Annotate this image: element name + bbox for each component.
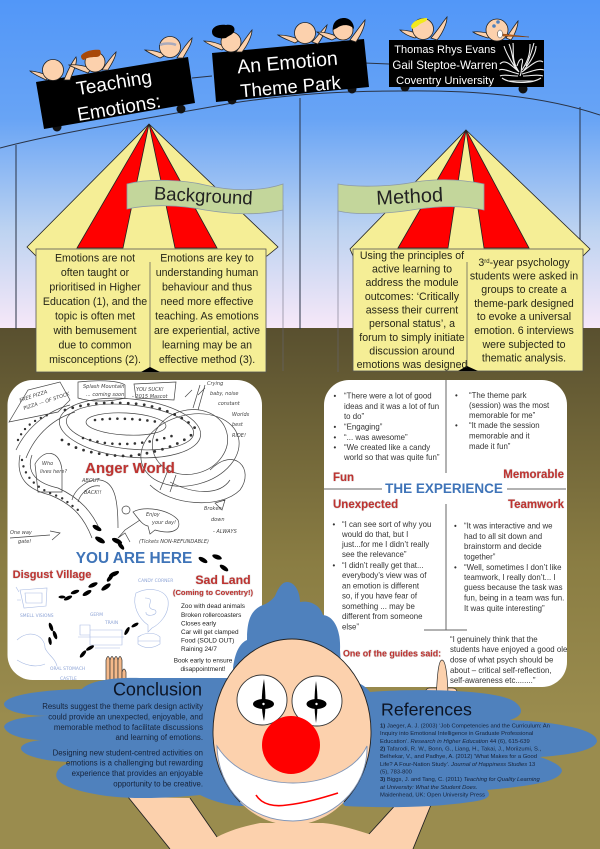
sketch: roller coaster map: YOU SUCK! (136, 387, 164, 393)
sketch: roller coaster map: ABOUT (81, 478, 100, 484)
banner: Method: Method (376, 184, 444, 210)
quotes: teamwork: • (454, 563, 457, 572)
text box: Background: Emotions are not (55, 252, 135, 264)
text: conclusion body: memorable method to facilitate discussions (54, 723, 203, 732)
clown nose (262, 716, 320, 774)
quotes: unexpected: • (332, 561, 336, 570)
quotes: fun: • (334, 392, 336, 400)
text box: Method: forum to simply initiate (359, 332, 465, 344)
sketch: roller coaster map: lives here? (40, 469, 67, 475)
quotes: fun: “... was awesome” (344, 433, 408, 442)
dividers (324, 380, 566, 630)
quotes: memorable (455, 391, 550, 451)
quotes: unexpected: • (332, 520, 336, 529)
text box: Method: -year psychology (490, 257, 570, 269)
quotes: memorable: • (455, 391, 458, 400)
label: Unexpected: Unexpected (333, 499, 398, 511)
quotes: memorable: • (455, 421, 458, 430)
quote: guide: dose of what psych should be (450, 656, 554, 664)
clown mouth (217, 746, 367, 821)
text box: Background: effective method (3). (159, 354, 255, 366)
list: Sad Land attractions: Car will get clamped (181, 629, 239, 636)
label: Anger World: Anger World (85, 460, 175, 477)
text: references list: (5), 783-800 (380, 770, 413, 776)
quote: guide (450, 635, 568, 685)
text box: Method: students were asked in (470, 270, 578, 282)
list: Sad Land attractions: disappointment! (180, 666, 226, 673)
quotes: unexpected: just...for me I didn’t really (341, 540, 429, 549)
roller coaster track and supports (0, 63, 600, 329)
text: conclusion body: Results suggest the theme park design activity (42, 702, 203, 711)
list: Sad Land attractions: Broken rollercoasters (181, 612, 241, 619)
quote: guide: self-awareness etc........” (450, 676, 536, 685)
icon: left eye (237, 675, 287, 725)
label: Disgust Village: Disgust Village (13, 569, 91, 581)
text: references list (380, 724, 550, 798)
text box: Background (36, 249, 266, 372)
sketch: roller coaster map: gate! (18, 539, 31, 545)
text box: Background: learning may be an (162, 340, 252, 352)
quotes: memorable: memorable for me” (469, 411, 536, 420)
sketch: roller coaster map: Enjoy (146, 512, 161, 518)
list: Sad Land attractions: Book early to ensure (174, 658, 233, 664)
text: conclusion body: emotions is a challenging but rewarding (66, 758, 203, 768)
clown body and arms (128, 797, 433, 849)
text box: Method: Using the principles of (360, 250, 464, 262)
text: references list: at University: What the Student Does. (380, 785, 477, 791)
quotes: memorable: made it fun” (469, 442, 511, 451)
rider 4 (204, 25, 252, 52)
text: references list: 2) Tafarodi, R. W., Bonn, G., Liang, H., Takai, J., Moriizumi, S., (380, 746, 542, 752)
sketch: roller coaster map: constant (218, 401, 241, 407)
sketch: roller coaster map: your day! (151, 520, 176, 526)
flagpoles (283, 200, 338, 372)
banner: Background (127, 180, 283, 214)
quotes: memorable: (session) was the most (469, 401, 550, 410)
text: references list: Maidenhead, UK: Open University Press (380, 792, 485, 798)
quotes: fun: • (334, 433, 336, 442)
panel: the experience (324, 380, 568, 687)
quotes: fun (334, 392, 440, 462)
quotes: fun: ideas and it was a lot of fun (344, 402, 439, 411)
list: Sad Land attractions (174, 603, 245, 673)
quotes: teamwork: It was quite interesting” (464, 604, 545, 613)
quotes: memorable: “The theme park (469, 391, 527, 400)
panel: theme park map (8, 380, 262, 682)
text box: Method: personal status’, a (369, 318, 455, 330)
quotes: fun: • (334, 443, 336, 452)
quotes: teamwork (454, 522, 564, 613)
tent: Method (338, 130, 590, 371)
sign: authors: Gail Steptoe-Warren (392, 59, 498, 72)
clown left fingers (106, 656, 126, 690)
quotes: teamwork: together” (464, 552, 496, 562)
quotes: fun: to do” (344, 412, 364, 421)
quotes: teamwork: teamwork, I really don’t... I (464, 573, 556, 582)
cloud: Conclusion (4, 678, 260, 806)
clown head (213, 639, 371, 825)
sketch: blue concept doodles: GERM (90, 612, 103, 618)
text box: Method: outcomes: ‘Critically (365, 291, 460, 303)
sketch: roller coaster map: - 2015 Mascot (132, 394, 168, 400)
text box: Background: teaching. As emotions (155, 310, 259, 322)
sign: authors (389, 40, 544, 94)
text: references list: Belhekar, V., and Padhye, A. (2012) ‘What Makes for a Good (380, 754, 537, 760)
list: Sad Land attractions: Raining 24/7 (181, 646, 217, 653)
text box: Method: 3 (478, 257, 484, 269)
banner: Background: Background (153, 182, 253, 209)
quotes: memorable: memorable and it (469, 432, 530, 440)
tent roof (27, 124, 278, 256)
sketch: roller coaster map: Broken (204, 506, 222, 512)
label: Memorable: Memorable (503, 469, 564, 481)
rider 8 (473, 19, 529, 41)
list: Sad Land attractions: Food (SOLD OUT) (181, 638, 234, 644)
sketch: blue concept doodles: CASTLE (60, 676, 77, 682)
quotes: teamwork: fun, being in a team was fun. (464, 594, 564, 602)
quotes: teamwork: guess because the task was (464, 583, 563, 592)
label: Fun: Fun (333, 472, 354, 484)
list: Sad Land attractions: Closes early (181, 620, 217, 628)
sketch: roller coaster map: - ALWAYS (213, 529, 238, 535)
sketch: blue concept doodles: ORAL STOMACH (50, 666, 85, 672)
sketch: roller coaster map (9, 381, 250, 545)
sketch: roller coaster map: Crying (207, 381, 223, 387)
sketch: roller coaster map: (Tickets NON-REFUNDABLE) (139, 539, 209, 545)
rider 3 (145, 36, 192, 58)
quotes: fun: “There were a lot of good (344, 392, 432, 400)
sign: An Emotion Theme Park (212, 39, 369, 104)
heading: Conclusion: Conclusion (113, 680, 202, 700)
sign: Teaching Emotions: Teaching (75, 67, 153, 100)
text box: Background: Education (1), and the (43, 296, 147, 308)
quotes: fun: “We created like a candy (344, 443, 430, 452)
sketch: roller coaster map: PIZZA — OF STOCK (23, 391, 71, 412)
sketch: roller coaster map: Worlds (232, 412, 250, 418)
tent: Background (27, 124, 283, 372)
text: conclusion body: could provide an unexpected, enjoyable, and (48, 712, 203, 722)
quote: guide: “I genuinely think that the (450, 635, 538, 644)
text: references list: Life? A Four-Nation Study’. Journal of Happiness Studies 13 (380, 762, 535, 768)
quotes: fun: world so that was quite fun” (343, 453, 440, 462)
quotes: unexpected: see the relevance” (342, 550, 407, 559)
heading: References: References (381, 700, 472, 720)
text box: Background: due to common (58, 340, 132, 352)
text box: Method: address the module (365, 277, 459, 289)
label: Sad Land: Sad Land (195, 573, 251, 587)
icon: phoenix logo (499, 43, 544, 82)
quotes: unexpected: else” (342, 622, 359, 632)
text box: Background: Emotions are key to (160, 252, 254, 264)
text box: Method: assess their current (366, 304, 458, 316)
label: Coming to Coventry: (Coming to Coventry!) (173, 588, 254, 597)
quotes: fun: “Engaging” (344, 422, 383, 432)
sign: Teaching Emotions (36, 57, 195, 132)
sketch: blue concept doodles: TRAIN (104, 620, 118, 626)
label: One of the guides said: One of the guides said: (343, 648, 441, 658)
text box: Background: misconceptions (2). (49, 354, 141, 366)
text box: Background: often taught or (61, 267, 130, 279)
text box: Background: are experiential, active (154, 325, 260, 337)
text: references list: Education’. Research in Higher Education 44 (6), 615-639 (380, 739, 530, 745)
sketch: roller coaster map: BACK!! (84, 490, 102, 496)
sign: An Emotion Theme Park: Theme Park (239, 72, 342, 101)
text: conclusion body (42, 702, 203, 788)
sketch: roller coaster map: Splash Mountain (83, 384, 124, 390)
heading: The Experience: THE EXPERIENCE (385, 481, 503, 496)
text box: Method (353, 249, 583, 371)
label: You are here: YOU ARE HERE (76, 550, 192, 567)
quotes: unexpected: something ... may be (342, 602, 415, 611)
icon: right eye (292, 676, 342, 726)
sketch: roller coaster map: baby, noise (210, 391, 238, 397)
text box: Method: were subjected to (481, 339, 566, 351)
quotes: unexpected: “I didn’t really get that... (342, 561, 424, 570)
list: Sad Land attractions: Zoo with dead animals (181, 603, 245, 610)
text box: Method: to evoke a universal (477, 311, 571, 323)
sketch: roller coaster map: best (232, 422, 244, 428)
text box: Background: behaviour and thus (162, 282, 252, 294)
quotes: unexpected: different from someone (342, 612, 423, 621)
quotes: memorable: “It made the session (469, 421, 540, 430)
quote: guide: students have enjoyed a good ole (450, 645, 568, 654)
sketch: blue concept doodles: CANDY CORNER (138, 578, 173, 584)
text box: Method: theme-park designed (474, 298, 574, 310)
text box: Method: discussion around (369, 346, 455, 358)
quotes: teamwork: had to all sit down and (464, 532, 542, 541)
quote: guide: about – critical self-reflection, (450, 666, 552, 675)
icon: footprints (48, 524, 229, 659)
rider 1 (30, 57, 76, 80)
text: references list: Inquiry into Emotional Intelligence in Graduate Professional (380, 731, 533, 737)
text box: Method: active learning to (372, 264, 452, 276)
cloud: References (330, 678, 597, 807)
quotes: unexpected: would do that, but I (341, 530, 408, 539)
text: references list: 1) Jaeger, A. J. (2003) ‘Job Competencies and the Curriculum: An (380, 724, 550, 730)
text box: Method: rd (484, 259, 490, 265)
sketch: roller coaster map: FREE PIZZA (19, 389, 49, 404)
text: conclusion body: opportunity to be creative. (113, 780, 203, 788)
quotes: unexpected: an emotion is different (342, 582, 420, 590)
sign: authors: Thomas Rhys Evans (394, 44, 496, 56)
sign: An Emotion Theme Park: An Emotion (236, 48, 339, 78)
sketch: blue concept doodles (16, 578, 173, 682)
quotes: unexpected: everybody’s view was of (342, 571, 427, 580)
background: ground (0, 328, 600, 849)
text: conclusion body: Designing new student-centred activities on (53, 748, 203, 758)
text: conclusion body: experience that provides an enjoyable (72, 769, 203, 778)
sketch: roller coaster map: Who (42, 461, 53, 467)
quotes: fun: • (334, 422, 336, 432)
sketch: blue concept doodles: SMELL VISIONS (20, 613, 54, 619)
sketch: roller coaster map: RIDE! (232, 433, 246, 439)
quotes: teamwork: “Well, sometimes I don’t like (464, 563, 562, 572)
quotes: teamwork: • (454, 522, 457, 530)
tent roof (350, 130, 590, 256)
text box: Method: groups to create a (481, 284, 567, 296)
text box: Background: prioritised in Higher (49, 282, 141, 294)
sketch: roller coaster map: One way (10, 530, 33, 536)
text: references list: 3) Biggs, J. and Tang, C. (2011) Teaching for Quality Learning (380, 777, 540, 783)
text: conclusion body: and learning of emotions. (115, 733, 203, 742)
quotes: unexpected: so, if you have fear of (342, 592, 418, 600)
text box: Background: understanding human (156, 267, 258, 279)
rider 7 (400, 17, 447, 40)
quotes: unexpected: “I can see sort of why you (342, 520, 431, 529)
clown right fingers (425, 660, 457, 700)
text box: Method: emotion. 6 interviews (474, 325, 574, 337)
text box: Background: need more effective (161, 296, 254, 308)
rider 2 (69, 50, 116, 73)
clown hair (233, 582, 342, 680)
text box: Background: with bemusement (52, 325, 137, 337)
text box: Background: topic is often met (55, 310, 135, 322)
background: sky (0, 0, 600, 329)
quotes: teamwork: “It was interactive and we (464, 522, 553, 530)
quotes: unexpected (332, 520, 431, 632)
text box: Method: thematic analysis. (482, 352, 566, 364)
text box: Method: emotions was designed (357, 359, 467, 371)
sketch: roller coaster map: down (211, 517, 224, 523)
sign: authors: Coventry University (396, 75, 494, 87)
quotes: teamwork: brainstorm and decide (464, 542, 542, 551)
rider 6 (317, 18, 365, 42)
rider 5 (278, 22, 327, 44)
label: Teamwork: Teamwork (508, 499, 565, 511)
banner: Method (338, 180, 484, 214)
sketch: roller coaster map: ... coming soon (86, 392, 124, 398)
sign: Teaching Emotions: Emotions: (76, 91, 162, 126)
riders on the coaster (30, 17, 529, 80)
